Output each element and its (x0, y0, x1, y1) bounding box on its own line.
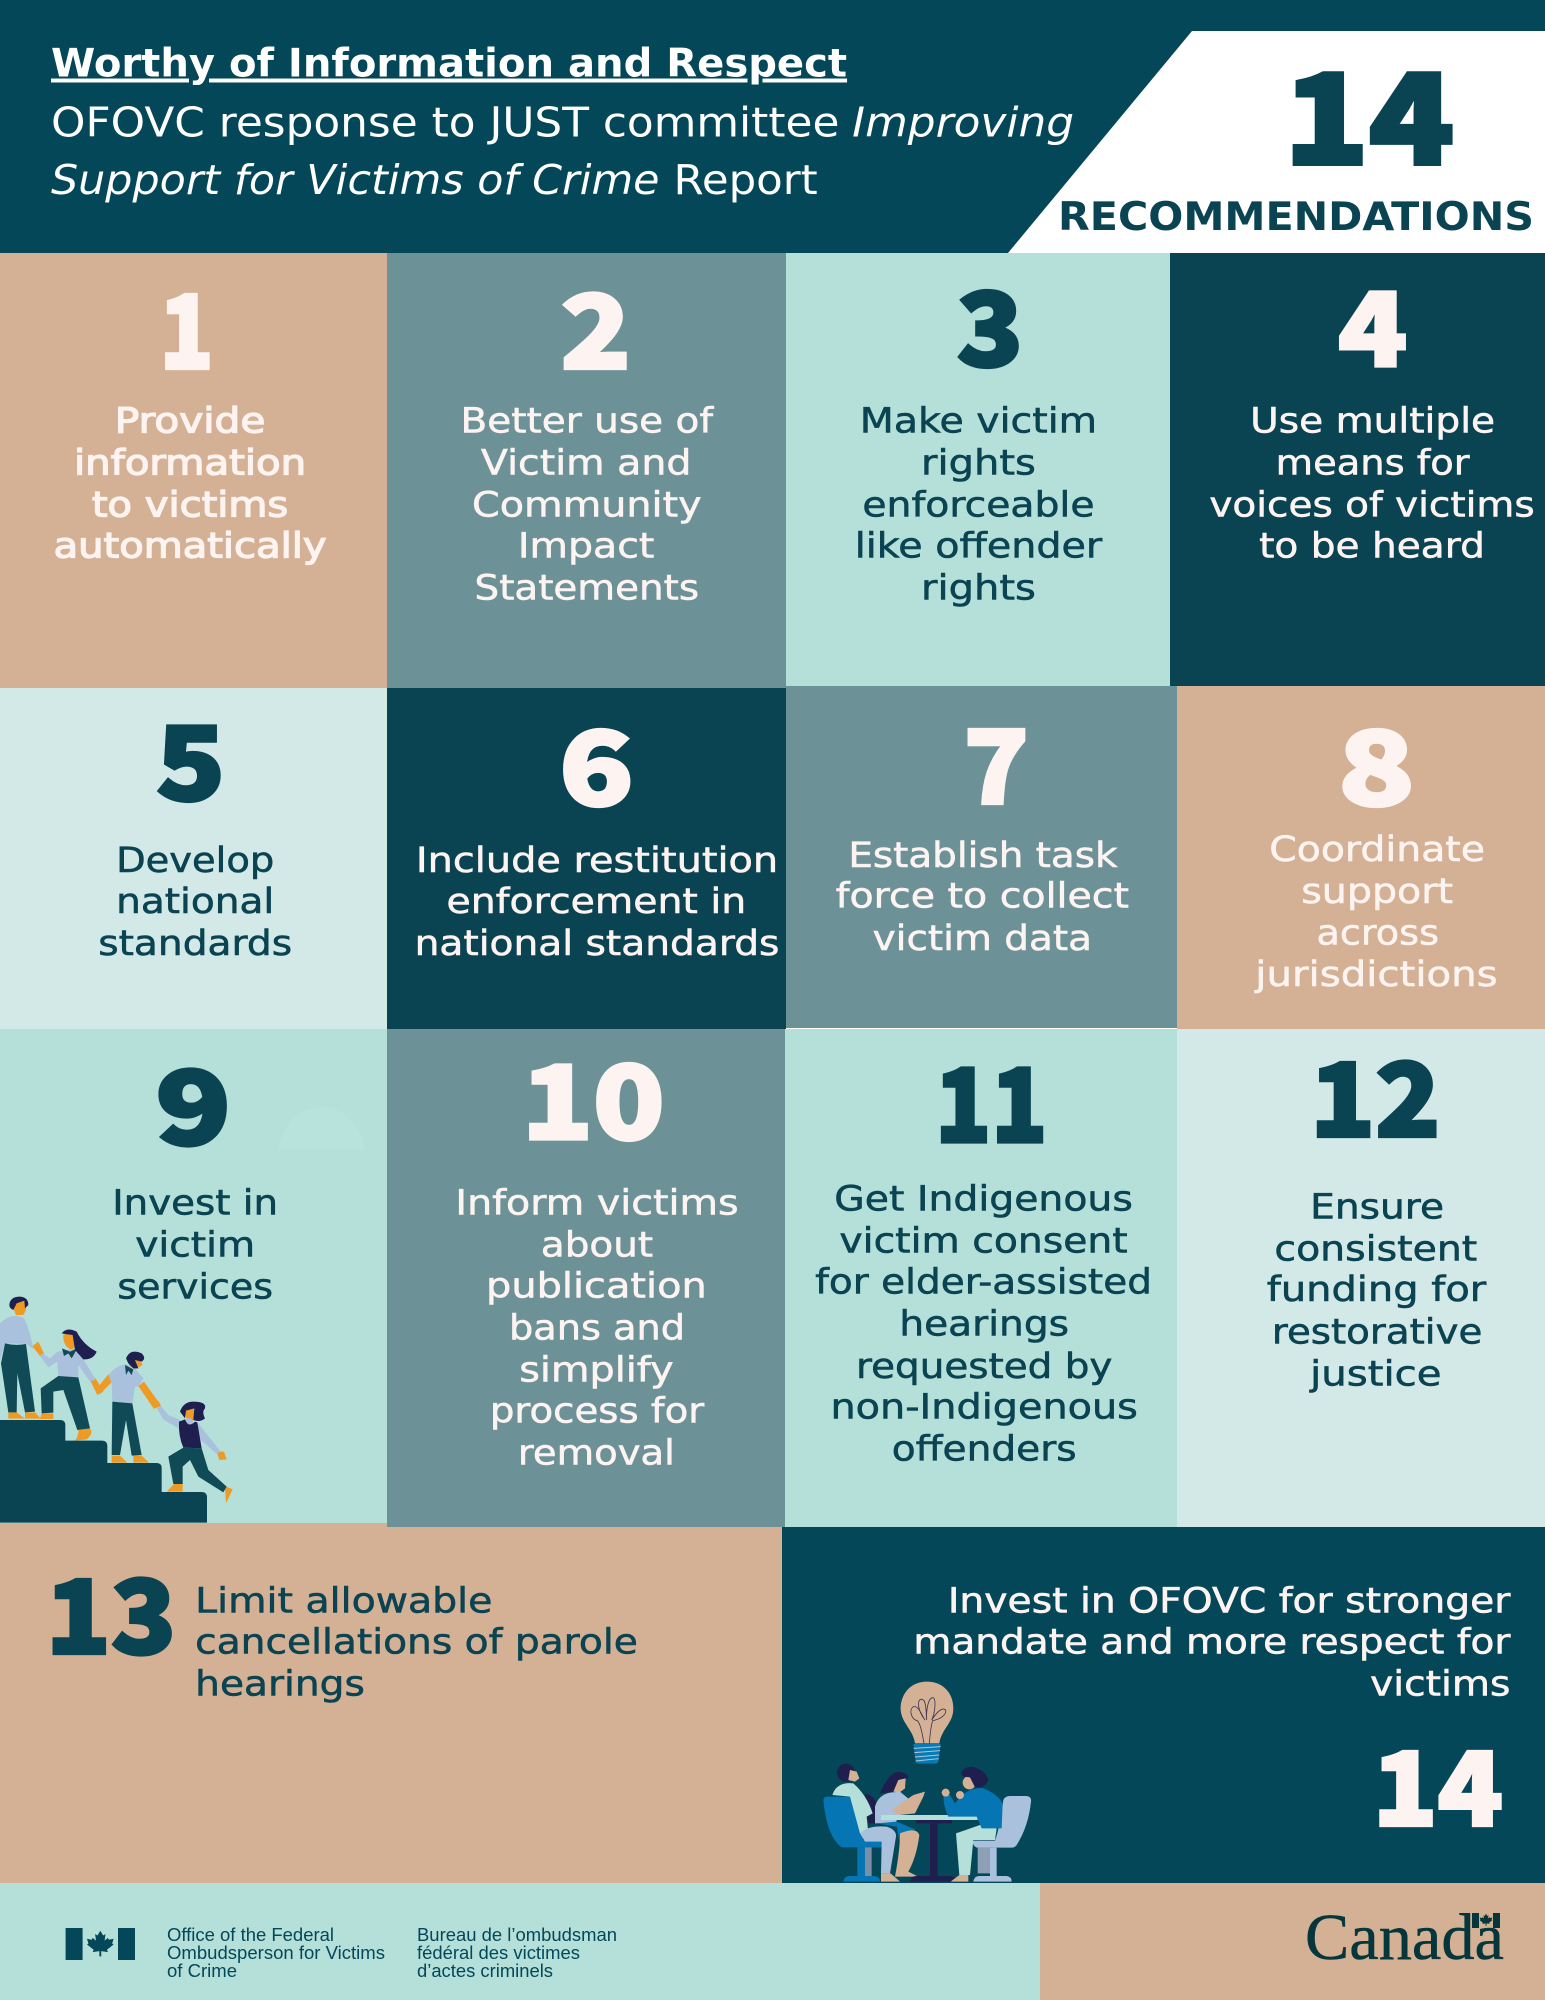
text 8: Coordinate (1269, 829, 1485, 870)
french office name: fédéral des victimes (417, 1942, 580, 1963)
panel: card 7 (786, 686, 1178, 1028)
text 6: enforcement in (446, 881, 746, 922)
english office name: Ombudsperson for Victims (167, 1942, 385, 1963)
Canada wordmark: Canada (1305, 1901, 1504, 1974)
text 9: services (117, 1267, 273, 1308)
text 4: voices of victims (1209, 485, 1535, 526)
text 5: Develop (116, 840, 274, 881)
title: OFOVC response to JUST committee (51, 98, 839, 146)
french office name: Bureau de l’ombudsman (417, 1924, 617, 1945)
english office name: of Crime (167, 1960, 237, 1981)
text 13 (195, 1580, 638, 1704)
icon: wordmark flag (1472, 1913, 1500, 1928)
number 13: 13 (46, 1536, 176, 1683)
text 5 (98, 840, 292, 964)
text 4 (1209, 400, 1535, 566)
number 5: 5 (156, 683, 225, 830)
text 13: cancellations of parole (195, 1621, 638, 1662)
text 3: rights (921, 568, 1036, 609)
panel: card 1 (0, 252, 387, 688)
text 2 (461, 400, 715, 609)
panel: card 12 (1177, 1020, 1545, 1527)
text 2: Statements (475, 568, 699, 609)
number 10: 10 (522, 1022, 665, 1169)
number 3: 3 (957, 249, 1023, 396)
text 1: Provide (115, 400, 265, 441)
title: Worthy of Information and Respect (51, 41, 847, 87)
text 6 (415, 840, 779, 964)
text 10: process for (490, 1390, 705, 1431)
text 1: information (74, 443, 306, 484)
footer left band (0, 1883, 1040, 2000)
text 9: Invest in (112, 1182, 278, 1223)
panel: card 4 (1170, 249, 1545, 686)
text 1 (54, 400, 327, 566)
panel: card 8 (1177, 686, 1545, 1029)
text 11: for elder-assisted (815, 1262, 1152, 1303)
text 11: offenders (892, 1429, 1077, 1470)
number 6: 6 (559, 688, 633, 835)
text 7: force to collect (836, 876, 1129, 917)
text 4: Use multiple (1250, 400, 1495, 441)
panel: card 13 (0, 1523, 782, 1883)
text 4: means for (1276, 443, 1470, 484)
text 8: across (1317, 913, 1439, 954)
text 3: like offender (855, 525, 1103, 566)
number 9: 9 (156, 1027, 231, 1174)
text 10: simplify (519, 1350, 674, 1391)
number 8: 8 (1338, 688, 1415, 835)
text 7 (836, 835, 1129, 959)
text 6: national standards (415, 923, 779, 964)
text 8: jurisdictions (1254, 954, 1498, 995)
number 2: 2 (561, 252, 631, 399)
text 7: Establish task (848, 835, 1118, 876)
text 10 (455, 1182, 739, 1474)
text 3: rights (921, 443, 1036, 484)
text 14: victims (1370, 1663, 1510, 1704)
english office name: Office of the Federal (167, 1924, 334, 1945)
icon: Canadian flag (66, 1928, 135, 1960)
text 5: standards (98, 923, 292, 964)
text 10: Inform victims (455, 1182, 739, 1223)
text 10: bans and (509, 1307, 685, 1348)
panel: card 5 (0, 683, 387, 1029)
number 7: 7 (964, 687, 1029, 834)
text 14: Invest in OFOVC for stronger (948, 1580, 1511, 1621)
french office name (417, 1924, 617, 1981)
panel: card 10 (387, 1022, 785, 1527)
text 11: non-Indigenous (830, 1387, 1138, 1428)
panel: card 9 (0, 1027, 387, 1523)
text 3: enforceable (862, 485, 1095, 526)
text 2: Better use of (461, 400, 715, 441)
header band (0, 0, 1545, 253)
header count 14: 14 (1284, 19, 1454, 200)
illustration: team around a table with a light bulb (823, 1682, 1031, 1882)
number 4: 4 (1338, 249, 1407, 396)
text 8: support (1301, 871, 1453, 912)
text 13: Limit allowable (195, 1580, 492, 1621)
text 12: consistent (1274, 1228, 1477, 1269)
panel: card 3 (786, 249, 1170, 688)
text 9 (112, 1182, 278, 1308)
number 12: 12 (1310, 1020, 1440, 1167)
text 1: to victims (92, 485, 288, 526)
text 2: Community (472, 485, 702, 526)
text 7: victim data (873, 918, 1092, 959)
panel: card 6 (387, 688, 786, 1029)
text 12: Ensure (1310, 1186, 1444, 1227)
panel: card 14 (782, 1527, 1545, 1883)
title: Support for Victims of Crime (51, 156, 660, 204)
text 4: to be heard (1259, 525, 1485, 566)
panel: card 11 (785, 1025, 1178, 1527)
text 3 (855, 400, 1103, 609)
title: Improving (852, 98, 1074, 146)
panel: card 2 (387, 252, 786, 688)
text 12: justice (1309, 1353, 1442, 1394)
text 11: hearings (899, 1304, 1069, 1345)
text 2: Impact (518, 525, 654, 566)
text 10: publication (486, 1265, 707, 1306)
text 11: requested by (856, 1346, 1112, 1387)
text 14 (913, 1580, 1511, 1704)
text 9: victim (135, 1225, 255, 1266)
text 12: funding for (1267, 1269, 1487, 1310)
text 11: Get Indigenous (834, 1179, 1133, 1220)
text 10: about (541, 1225, 653, 1266)
text 11 (815, 1179, 1152, 1470)
header label recommendations: RECOMMENDATIONS (1058, 195, 1534, 240)
text 14: mandate and more respect for (913, 1621, 1511, 1662)
white recommendations panel (1008, 31, 1545, 253)
text 10: removal (518, 1433, 675, 1474)
number 1: 1 (159, 252, 214, 399)
text 8 (1254, 829, 1498, 995)
text 2: Victim and (481, 443, 691, 484)
text 13: hearings (195, 1663, 365, 1704)
text 6: Include restitution (416, 840, 778, 881)
french office name: d’actes criminels (417, 1960, 553, 1981)
number 11: 11 (935, 1025, 1047, 1172)
illustration: people climbing stairs (0, 1297, 233, 1523)
title: Report (674, 156, 818, 204)
text 1: automatically (54, 525, 327, 566)
text 11: victim consent (839, 1221, 1128, 1262)
text 5: national (116, 881, 274, 922)
title (51, 41, 1074, 204)
text 12: restorative (1272, 1311, 1482, 1352)
footer right band with wordmark (1040, 1883, 1545, 2000)
text 3: Make victim (860, 400, 1097, 441)
english office name (167, 1924, 385, 1981)
text 12 (1267, 1186, 1487, 1394)
number 14: 14 (1373, 1709, 1503, 1856)
